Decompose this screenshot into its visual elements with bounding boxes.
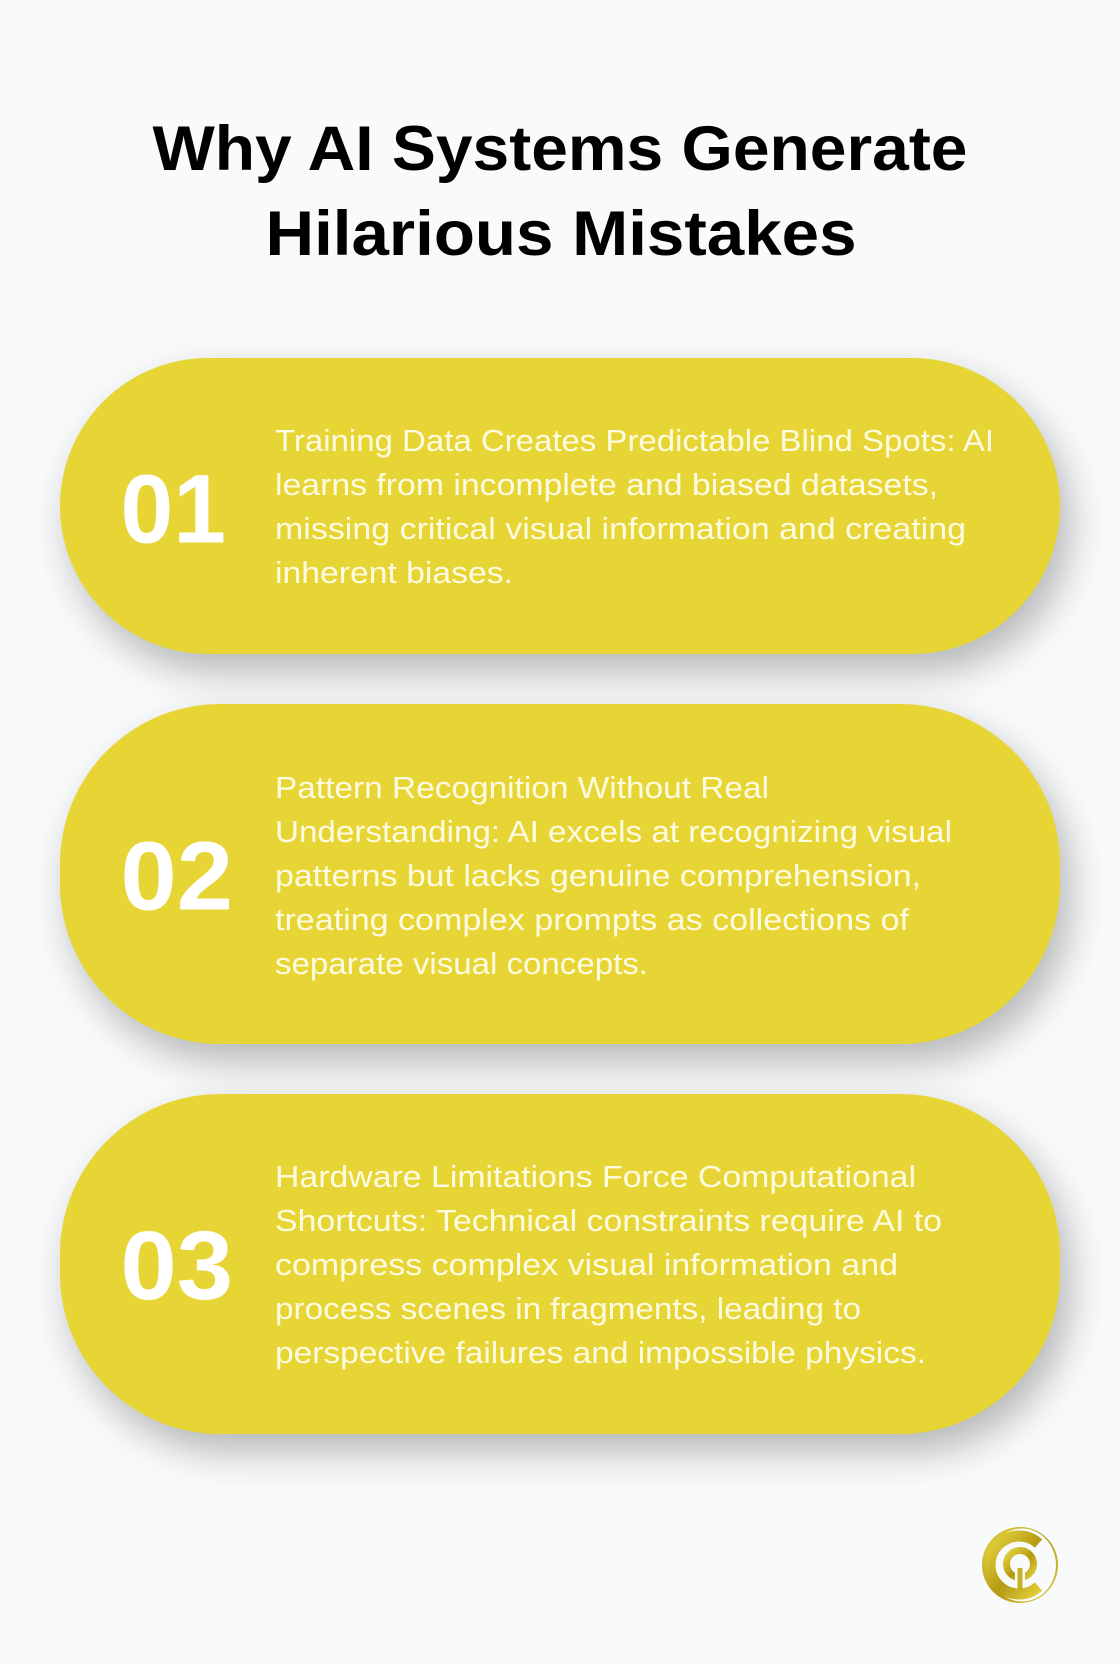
- title: [152, 114, 968, 269]
- panel: step 02: [60, 704, 1070, 1062]
- text: training data: learns from incomplete and biased datasets,: [275, 468, 938, 502]
- text: hardware limitations: compress complex visual information and: [275, 1248, 898, 1282]
- text: hardware limitations: Shortcuts: Technical constraints require AI to: [275, 1204, 942, 1238]
- text: hardware limitations: perspective failures and impossible physics.: [275, 1336, 926, 1370]
- icon: logo: [982, 1527, 1058, 1603]
- number 03: 03: [120, 1211, 233, 1320]
- number 01: 01: [120, 454, 226, 564]
- text: pattern recognition: [275, 771, 952, 981]
- text: training data: Training Data Creates Predictable Blind Spots: AI: [275, 424, 994, 458]
- title: Hilarious Mistakes: [266, 199, 856, 269]
- text: pattern recognition: Understanding: AI excels at recognizing visual: [275, 815, 952, 849]
- text: hardware limitations: Hardware Limitations Force Computational: [275, 1160, 916, 1194]
- text: pattern recognition: Pattern Recognition Without Real: [275, 771, 769, 805]
- text: hardware limitations: process scenes in fragments, leading to: [275, 1292, 861, 1326]
- panel: step 03: [60, 1094, 1070, 1452]
- text: training data: inherent biases.: [275, 556, 513, 590]
- text: pattern recognition: separate visual concepts.: [275, 947, 648, 981]
- title: Why AI Systems Generate: [152, 114, 968, 184]
- text: pattern recognition: patterns but lacks genuine comprehension,: [275, 859, 921, 893]
- text: hardware limitations: [275, 1160, 942, 1370]
- text: training data: missing critical visual information and creating: [275, 512, 966, 546]
- text: pattern recognition: treating complex prompts as collections of: [275, 903, 910, 937]
- panel: step 01: [60, 358, 1070, 672]
- text: training data: [275, 424, 994, 590]
- number 02: 02: [120, 822, 233, 930]
